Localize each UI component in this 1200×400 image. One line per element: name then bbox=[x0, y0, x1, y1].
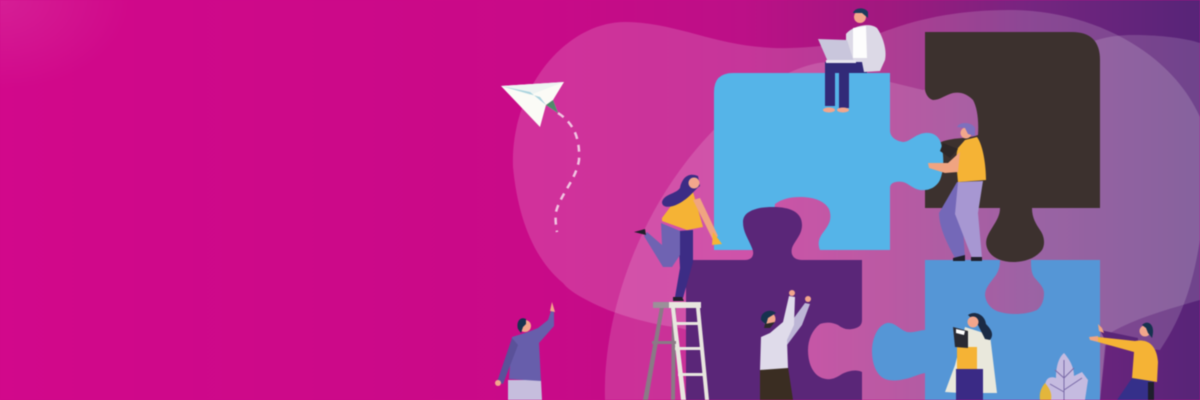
person: man pointing up bbox=[495, 302, 555, 400]
background blob: lower bbox=[605, 35, 1200, 400]
paper plane with dashed trail bbox=[501, 82, 579, 232]
person: woman with clipboard bbox=[945, 313, 997, 400]
background blob: upper bbox=[513, 10, 1200, 400]
puzzle piece: dark brown bbox=[925, 32, 1100, 262]
person: man with laptop on top bbox=[818, 8, 886, 113]
person: bearded man reaching up bbox=[760, 290, 811, 400]
puzzle piece: light blue bbox=[714, 73, 943, 250]
person: man pushing blue piece bbox=[928, 123, 986, 261]
puzzle piece: mid blue bbox=[872, 260, 1100, 400]
person: woman on ladder bbox=[634, 175, 722, 301]
icon: decorative plant bbox=[1040, 353, 1088, 400]
person: man pushing from the right bbox=[1089, 323, 1158, 400]
ladder bbox=[643, 302, 709, 400]
puzzle piece: dark purple bbox=[686, 207, 862, 400]
